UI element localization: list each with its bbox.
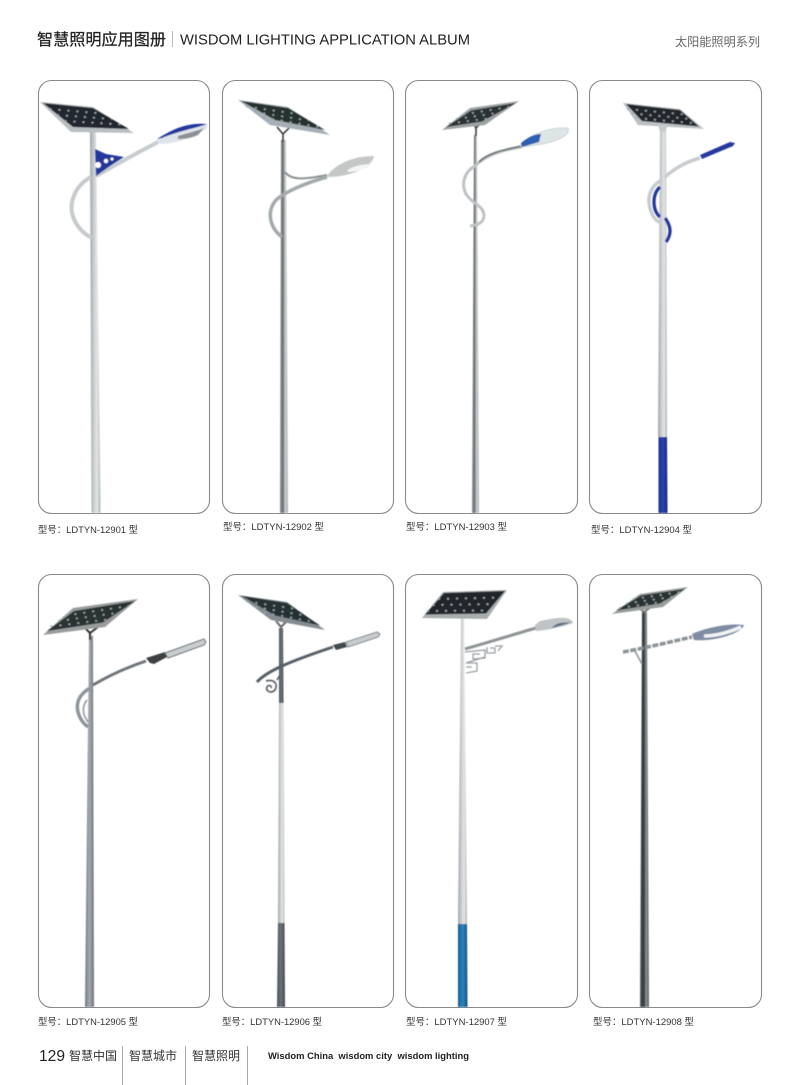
blue bracket xyxy=(95,149,124,176)
solar panel xyxy=(422,590,507,619)
bracket xyxy=(658,125,668,132)
solar panel xyxy=(43,599,138,635)
caption 12908: 型号：LDTYN-12908 型 xyxy=(593,1017,694,1028)
main arm xyxy=(623,637,692,652)
lamp head xyxy=(700,142,735,159)
solar panel xyxy=(612,587,688,614)
loop arm xyxy=(649,180,662,223)
solar panel xyxy=(238,100,330,135)
panel: LDTYN-12901 xyxy=(38,80,210,514)
panel: LDTYN-12908 xyxy=(590,574,762,1008)
pole xyxy=(90,132,100,513)
lamp head xyxy=(327,156,374,177)
main arm xyxy=(465,628,536,649)
lamp head xyxy=(535,618,573,631)
page number: 129 xyxy=(39,1048,65,1065)
dark pole base xyxy=(277,923,285,1007)
caption 12904: 型号：LDTYN-12904 型 xyxy=(591,525,692,536)
main arm xyxy=(257,647,333,682)
main arm xyxy=(665,158,700,177)
bracket xyxy=(638,607,651,612)
pole xyxy=(85,636,94,1007)
header title: WISDOM LIGHTING APPLICATION ALBUM xyxy=(180,32,470,48)
footer tab: city: 智慧城市 xyxy=(129,1048,177,1063)
panel: LDTYN-12905 xyxy=(38,574,210,1008)
caption 12905: 型号：LDTYN-12905 型 xyxy=(38,1017,138,1028)
main arm xyxy=(93,661,146,685)
footer tab: China: 智慧中国 xyxy=(69,1048,117,1063)
scroll ornament xyxy=(266,675,280,692)
upper pole xyxy=(279,628,284,703)
panel: LDTYN-12907 xyxy=(406,574,578,1008)
panel: LDTYN-12906 xyxy=(222,574,394,1008)
connector xyxy=(146,652,167,664)
caption 12906: 型号：LDTYN-12906 型 xyxy=(222,1017,322,1028)
pole xyxy=(280,140,288,513)
header title xyxy=(37,30,470,49)
lamp head xyxy=(692,625,744,640)
series label: 太阳能照明系列 xyxy=(675,34,760,49)
main arm xyxy=(479,146,522,162)
solar panel xyxy=(442,101,519,130)
arm strut xyxy=(635,651,642,664)
main arm xyxy=(96,142,158,176)
lamp head xyxy=(157,124,207,144)
footer tab: lighting: 智慧照明 xyxy=(192,1048,240,1063)
lamp head xyxy=(346,632,380,647)
pole xyxy=(640,612,649,1007)
caption 12901: 型号：LDTYN-12901 型 xyxy=(38,525,138,536)
bracket xyxy=(277,127,290,142)
blue ribbon xyxy=(654,187,670,242)
upper arm xyxy=(285,172,327,178)
caption 12903: 型号：LDTYN-12903 型 xyxy=(406,522,507,533)
connector xyxy=(333,642,347,650)
pole xyxy=(658,128,667,437)
bracket xyxy=(84,627,98,640)
caption 12907: 型号：LDTYN-12907 型 xyxy=(406,1017,507,1028)
solar panel xyxy=(623,103,704,129)
header title: 智慧照明应用图册 xyxy=(37,30,166,49)
fret ornament xyxy=(465,646,502,673)
bracket xyxy=(472,122,482,136)
panel: LDTYN-12903 xyxy=(406,80,578,514)
solar panel xyxy=(40,102,134,133)
footer xyxy=(39,1046,469,1085)
footer slogan: Wisdom China wisdom city wisdom lighting xyxy=(268,1051,469,1062)
loop arm xyxy=(72,177,92,238)
panel: LDTYN-12904 xyxy=(590,80,762,514)
bracket xyxy=(276,621,287,627)
lamp head xyxy=(165,639,206,658)
inner loop xyxy=(83,700,88,722)
silver pole xyxy=(278,703,284,923)
serpentine arm xyxy=(464,147,522,226)
solar panel xyxy=(238,595,325,630)
lamp head xyxy=(521,128,568,147)
pole xyxy=(472,135,479,513)
panel: LDTYN-12902 xyxy=(222,80,394,514)
blue pole base xyxy=(458,924,468,1007)
caption 12902: 型号：LDTYN-12902 型 xyxy=(223,522,324,533)
lower arm xyxy=(270,177,327,237)
loop arm xyxy=(77,688,90,727)
blue pole base xyxy=(658,437,668,513)
pole xyxy=(458,617,467,924)
